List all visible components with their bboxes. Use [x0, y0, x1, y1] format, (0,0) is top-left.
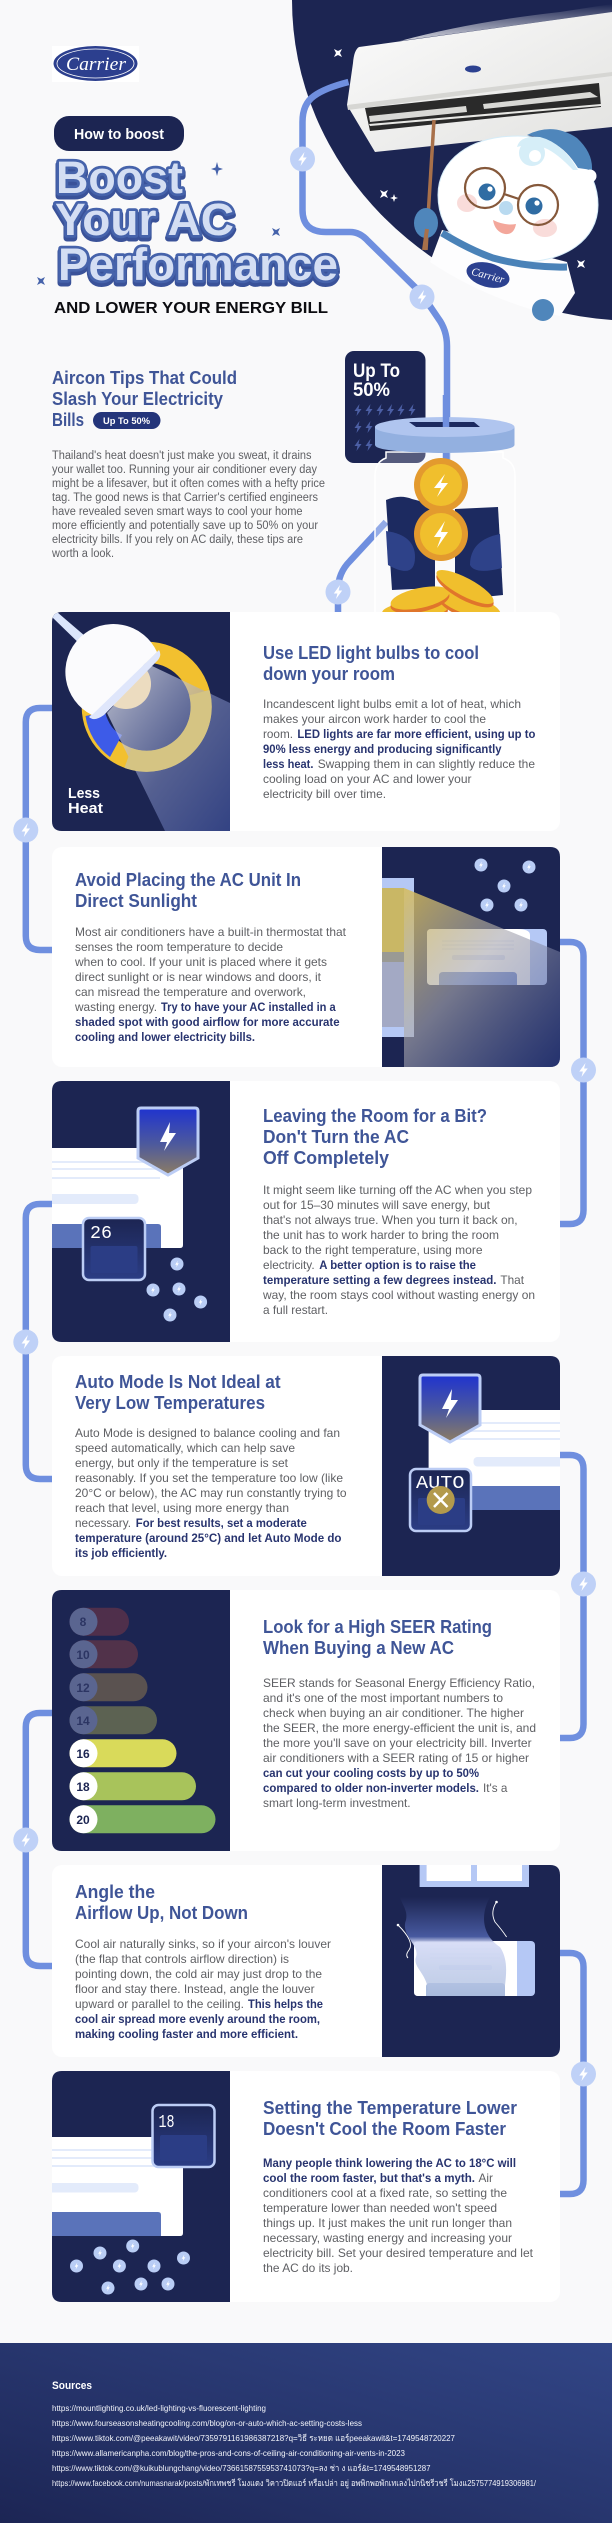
savings jar lid	[375, 395, 514, 453]
body text: the AC do its job.	[263, 2261, 353, 2275]
source links: https://www.tiktok.com/@peeakawit/video/7359791161986387218?q=วิธี ระหยด แอร์peeakawit&t=1749548720227	[52, 2433, 455, 2443]
panel: direct sunlight	[52, 847, 560, 1067]
brand logo: Carrier	[66, 54, 127, 75]
body text: speed automatically, which can help save	[75, 1441, 295, 1455]
body text: the more you'll save on your electricity bill. Inverter	[263, 1736, 532, 1750]
body text: cool air spread more evenly around the room,	[75, 2012, 320, 2026]
title: Performance	[58, 239, 338, 290]
intro paragraph: electricity bills. If you rely on AC daily, these tips are	[52, 534, 303, 546]
body text: temperature setting a few degrees instead.	[263, 1273, 496, 1287]
body text: shaded spot with good airflow for more accurate	[75, 1015, 340, 1029]
intro heading: Bills	[52, 410, 84, 430]
heading: Setting the Temperature Lower	[263, 2098, 517, 2118]
body text: energy, but only if the temperature is set	[75, 1456, 289, 1470]
body text: less heat.	[263, 757, 313, 771]
heading	[263, 643, 479, 684]
intro paragraph: tag. The good news is that Carrier's certified engineers	[52, 492, 318, 504]
panel: lower temperature	[40, 2071, 560, 2302]
label: less heat: Heat	[68, 800, 103, 817]
heading	[75, 1882, 248, 1923]
body text: 90% less energy and producing significantly	[263, 742, 502, 756]
body text: cooling and lower electricity bills.	[75, 1030, 255, 1044]
chart: SEER rating bars: 14	[76, 1714, 90, 1728]
body text: necessary.	[75, 1516, 131, 1530]
body text: way, the room stays cool without wasting energy on	[262, 1288, 535, 1302]
body text: electricity bill. Set your desired temperature and let	[263, 2246, 534, 2260]
body text: the unit has to work harder to bring the room	[263, 1228, 499, 1242]
body text: reasonably. If you set the temperature too low (like	[75, 1471, 343, 1485]
title	[55, 152, 338, 293]
footer: sources	[0, 2343, 612, 2523]
body text: check when buying an air conditioner. The higher	[263, 1706, 524, 1720]
body text: 20°C or below), the AC may run constantly trying to	[75, 1486, 347, 1500]
heading: Doesn't Cool the Room Faster	[263, 2119, 506, 2139]
left connector wire 3	[26, 1713, 52, 1966]
source links: https://mountlighting.co.uk/led-lighting-vs-fluorescent-lighting	[52, 2403, 266, 2413]
body text	[75, 1426, 347, 1560]
icon: right node 1	[571, 1058, 596, 1082]
body text: It might seem like turning off the AC when you step	[263, 1183, 532, 1197]
heading: Don't Turn the AC	[263, 1127, 409, 1147]
heading	[75, 1372, 281, 1413]
body text	[74, 925, 347, 1044]
heading: Use LED light bulbs to cool	[263, 643, 479, 663]
heading: Airflow Up, Not Down	[75, 1903, 248, 1923]
body text: electricity bill over time.	[263, 787, 386, 801]
panel: LED bulbs	[52, 612, 560, 831]
right connector wire 3	[560, 1953, 584, 2194]
intro heading: Slash Your Electricity	[52, 389, 223, 409]
body text: air conditioners with a SEER rating of 15 or higher	[263, 1751, 529, 1765]
panel: leaving the room	[40, 1081, 560, 1342]
illustration: thermostat 18 and cold dots	[40, 2071, 230, 2302]
body text: That	[500, 1273, 525, 1287]
body text: that's not always true. When you turn it back on,	[263, 1213, 518, 1227]
title: Your AC	[55, 194, 234, 245]
label: less heat	[68, 785, 103, 817]
illustration: sunlight on AC	[382, 847, 560, 1067]
source links: https://www.facebook.com/numasnarak/posts/พักเทพชรี โมงแดง วิคาวปิดแอร์ หรือเปล่า อยู่ อพพิกพอพักเทเลงไปกนิชรีวชรี โมงแ2575774919306981/	[52, 2478, 537, 2489]
badge: up to 50%	[93, 412, 160, 429]
body text: temperature lower than needed won't speed	[263, 2201, 497, 2215]
body text: can misread the temperature and overwork,	[75, 985, 306, 999]
body text: cool the room faster, but that's a myth.	[263, 2171, 475, 2185]
chart: SEER rating bars: 12	[76, 1681, 90, 1695]
body text	[263, 2156, 534, 2275]
body text	[262, 1183, 535, 1317]
icon: left node 2	[13, 1330, 38, 1354]
chart: SEER rating bars: 16	[76, 1747, 90, 1761]
sparkles	[334, 49, 585, 268]
sources heading: Sources	[52, 2380, 92, 2392]
body text: temperature (around 25°C) and let Auto Mode do	[75, 1531, 342, 1545]
source links: https://www.fourseasonsheatingcooling.com/blog/on-or-auto-which-ac-setting-costs-less	[52, 2418, 362, 2428]
label: less heat: Less	[68, 785, 100, 802]
body text: Try to have your AC installed in a	[161, 1000, 336, 1014]
right connector wire 1	[560, 942, 584, 1224]
icon: right node 3	[571, 2062, 596, 2086]
body text: can cut your cooling costs by up to 50%	[263, 1766, 479, 1780]
body text: LED lights are far more efficient, using up to	[297, 727, 535, 741]
intro paragraph: your wallet too. Running your air conditioner every day	[52, 464, 317, 476]
intro paragraph: might be a lifesaver, but it often comes with a hefty price	[52, 478, 325, 490]
icon: wire node upper	[290, 146, 315, 172]
body text: compared to older non-inverter models.	[263, 1781, 479, 1795]
chart: SEER rating bars	[70, 1608, 216, 1833]
body text: For best results, set a moderate	[136, 1516, 307, 1530]
air conditioner unit	[347, 4, 612, 152]
body text: when to cool. If your unit is placed where it gets	[74, 955, 327, 969]
body text: This helps the	[248, 1997, 323, 2011]
chart: SEER rating bars: 10	[76, 1648, 90, 1662]
brand logo	[52, 46, 139, 82]
body text: Swapping them in can slightly reduce the	[318, 757, 535, 771]
icon: wire node lower	[410, 284, 434, 310]
illustration: light bulb	[52, 612, 230, 831]
hero navy backdrop	[292, 0, 612, 320]
intro paragraph: worth a look.	[51, 548, 114, 560]
body text: conditioners cool at a fixed rate, so setting the	[263, 2186, 507, 2200]
title sparkles	[37, 162, 280, 285]
body text: smart long-term investment.	[263, 1796, 411, 1810]
body text: necessary, wasting energy and increasing your	[263, 2231, 512, 2245]
body text: a full restart.	[263, 1303, 328, 1317]
source links: https://www.allamericanpha.com/blog/the-pros-and-cons-of-ceiling-air-conditioning-air-vents-in-2023	[52, 2448, 405, 2458]
heading: When Buying a New AC	[263, 1638, 454, 1658]
heading: Off Completely	[263, 1148, 389, 1168]
body text: Cool air naturally sinks, so if your aircon's louver	[75, 1937, 331, 1951]
icon: left node 3	[13, 1828, 38, 1852]
heading	[75, 870, 301, 911]
heading	[263, 1106, 487, 1168]
intro heading: Aircon Tips That Could	[52, 368, 237, 388]
body text: (the flap that controls airflow direction) is	[75, 1952, 289, 1966]
body text	[75, 1937, 331, 2041]
body text	[263, 1676, 536, 1810]
illustration: thermostat 18 and cold dots: 18	[158, 2113, 174, 2133]
intro paragraph: more efficiently and potentially save up to 50% on your	[52, 520, 318, 532]
savings tag: up to 50%	[345, 351, 426, 463]
body text: wasting energy.	[74, 1000, 157, 1014]
savings jar with coins	[375, 452, 515, 628]
illustration: shield and auto display	[382, 1356, 574, 1576]
heading: Very Low Temperatures	[75, 1393, 265, 1413]
body text: pointing down, the cold air may just drop to the	[75, 1967, 322, 1981]
body text: Incandescent light bulbs emit a lot of heat, which	[263, 697, 521, 711]
body text: cooling load on your AC and lower your	[263, 772, 472, 786]
panel: angle the airflow	[52, 1860, 560, 2057]
intro paragraph: Thailand's heat doesn't just make you sweat, it drains	[52, 450, 312, 462]
title: Boost	[56, 152, 183, 203]
body text: the SEER, the more energy-efficient the unit is, and	[263, 1721, 536, 1735]
body text: It's a	[483, 1781, 508, 1795]
illustration: shield and thermostat 26	[40, 1081, 230, 1342]
icon: wire node at jar	[326, 580, 350, 604]
savings tag: up to 50%: Up To	[353, 361, 400, 382]
heading: Leaving the Room for a Bit?	[263, 1106, 487, 1126]
body text: floor and stay there. Instead, angle the louver	[75, 1982, 315, 1996]
body text: out for 15–30 minutes will save energy, but	[263, 1198, 491, 1212]
heading: Look for a High SEER Rating	[263, 1617, 492, 1637]
heading: Angle the	[75, 1882, 155, 1902]
chart: SEER rating bars: 20	[76, 1813, 90, 1827]
source links: https://www.tiktok.com/@kuikublungchang/video/7366158755953741073?q=ลง ช่า ง แอร์&t=1749548951287	[52, 2463, 431, 2473]
mascot character: Carrier	[470, 266, 506, 286]
body text: making cooling faster and more efficient.	[75, 2027, 298, 2041]
body text: room.	[263, 727, 293, 741]
heading	[263, 1617, 492, 1658]
title: Boost	[56, 155, 183, 206]
savings tag: up to 50%: 50%	[353, 380, 390, 401]
body text: reach that level, using more energy than	[75, 1501, 289, 1515]
illustration: shield and auto display: AUTO	[416, 1474, 464, 1494]
intro paragraph	[51, 450, 325, 560]
illustration: airflow over AC	[382, 1860, 560, 2057]
subtitle: AND LOWER YOUR ENERGY BILL	[54, 300, 328, 317]
connector wire: jar to first card	[338, 522, 386, 612]
icon: right node 2	[571, 1572, 596, 1596]
body text: back to the right temperature, using more	[263, 1243, 483, 1257]
connector wire: AC to savings jar	[302, 82, 447, 470]
panel: SEER rating	[52, 1590, 560, 1851]
body text: Air	[478, 2171, 493, 2185]
body text: direct sunlight or is near windows and doors, it	[75, 970, 322, 984]
body text: Many people think lowering the AC to 18°C will	[263, 2156, 516, 2170]
body text: its job efficiently.	[75, 1546, 167, 1560]
left connector wire 2	[26, 1204, 52, 1479]
body text: Auto Mode is designed to balance cooling and fan	[75, 1426, 340, 1440]
mascot character	[414, 120, 598, 321]
body text: A better option is to raise the	[319, 1258, 476, 1272]
pill: how to boost: How to boost	[74, 126, 164, 143]
title: Performance	[58, 242, 338, 293]
heading: Avoid Placing the AC Unit In	[75, 870, 301, 890]
body text: SEER stands for Seasonal Energy Efficiency Ratio,	[263, 1676, 535, 1690]
source links	[52, 2403, 537, 2489]
icon: left node 1	[13, 818, 38, 842]
heading: Direct Sunlight	[75, 891, 197, 911]
chart: SEER rating bars: 18	[76, 1780, 90, 1794]
panel: auto mode	[52, 1356, 574, 1576]
body text: Most air conditioners have a built-in thermostat that	[75, 925, 347, 939]
body text: things up. It just makes the unit run longer than	[263, 2216, 512, 2230]
intro heading	[52, 368, 237, 430]
body text: senses the room temperature to decide	[75, 940, 283, 954]
intro paragraph: have revealed seven smart ways to cool your home	[52, 506, 302, 518]
heading: down your room	[263, 664, 395, 684]
body text: electricity.	[263, 1258, 315, 1272]
title: Your AC	[55, 197, 234, 248]
pill: how to boost	[54, 116, 184, 151]
heading	[263, 2098, 517, 2139]
right connector wire 2	[560, 1455, 584, 1738]
left connector wire 1	[26, 708, 52, 950]
illustration: shield and thermostat 26: 26	[90, 1224, 112, 1244]
body text: upward or parallel to the ceiling.	[75, 1997, 244, 2011]
heading: Auto Mode Is Not Ideal at	[75, 1372, 281, 1392]
badge: up to 50%: Up To 50%	[103, 416, 151, 427]
chart: SEER rating bars: 8	[80, 1615, 87, 1629]
body text	[263, 697, 535, 801]
body text: makes your aircon work harder to cool the	[263, 712, 486, 726]
body text: and it's one of the most important numbers to	[263, 1691, 503, 1705]
